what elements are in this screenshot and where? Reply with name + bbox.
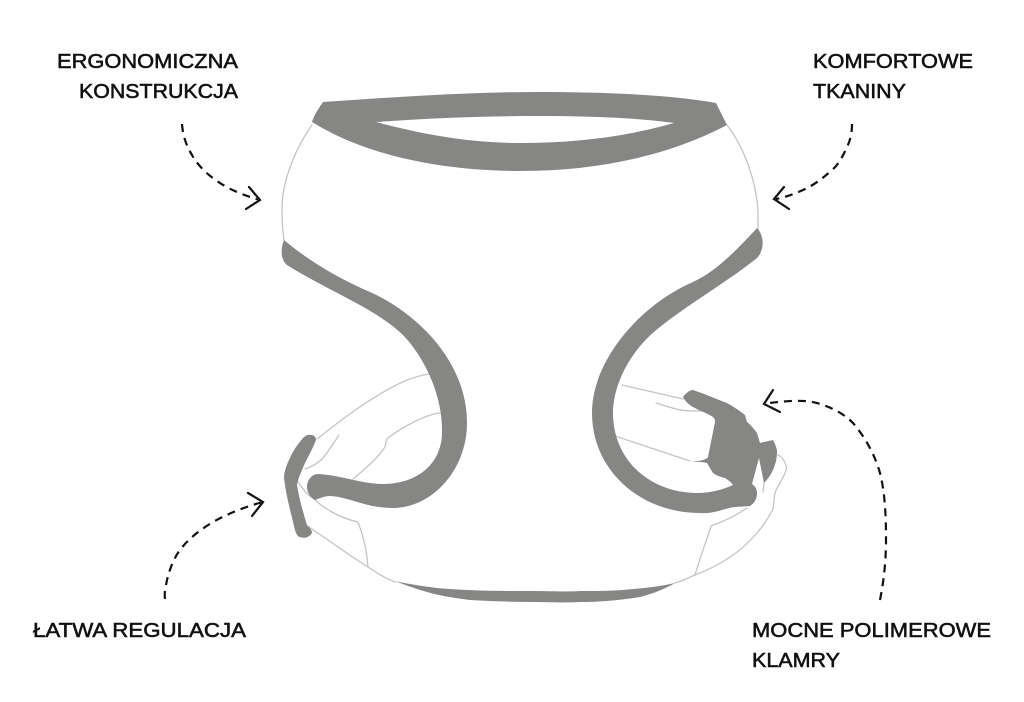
right strap <box>592 228 763 513</box>
label: komfortowe tkaniny: TKANINY <box>813 81 906 103</box>
right buckle <box>683 390 777 485</box>
label: latwa regulacja: ŁATWA REGULACJA <box>33 620 247 642</box>
arrow: to upper left of harness <box>182 124 260 209</box>
callout: mocne polimerowe klamry <box>752 390 991 672</box>
label: komfortowe tkaniny <box>813 51 973 103</box>
callout: komfortowe tkaniny <box>774 51 973 209</box>
label: mocne polimerowe klamry <box>752 620 991 672</box>
label: mocne polimerowe klamry: MOCNE POLIMEROWE <box>752 620 991 642</box>
label: ergonomiczna konstrukcja: KONSTRUKCJA <box>79 81 239 103</box>
left strap <box>282 240 467 508</box>
label: mocne polimerowe klamry: KLAMRY <box>752 650 840 672</box>
harness illustration <box>282 92 786 602</box>
label: komfortowe tkaniny: KOMFORTOWE <box>813 51 973 73</box>
arrow: to right buckle <box>764 390 886 600</box>
neck band <box>312 92 727 171</box>
label: ergonomiczna konstrukcja: ERGONOMICZNA <box>57 51 239 73</box>
callout: latwa regulacja <box>33 493 263 642</box>
arrow: to upper right of harness <box>774 124 852 209</box>
arrow: to left adjuster <box>165 493 263 599</box>
callout: ergonomiczna konstrukcja <box>57 51 260 209</box>
harness body outline <box>282 125 786 583</box>
label: ergonomiczna konstrukcja <box>57 51 239 103</box>
left adjuster tab <box>284 435 316 538</box>
bottom band <box>395 581 675 602</box>
